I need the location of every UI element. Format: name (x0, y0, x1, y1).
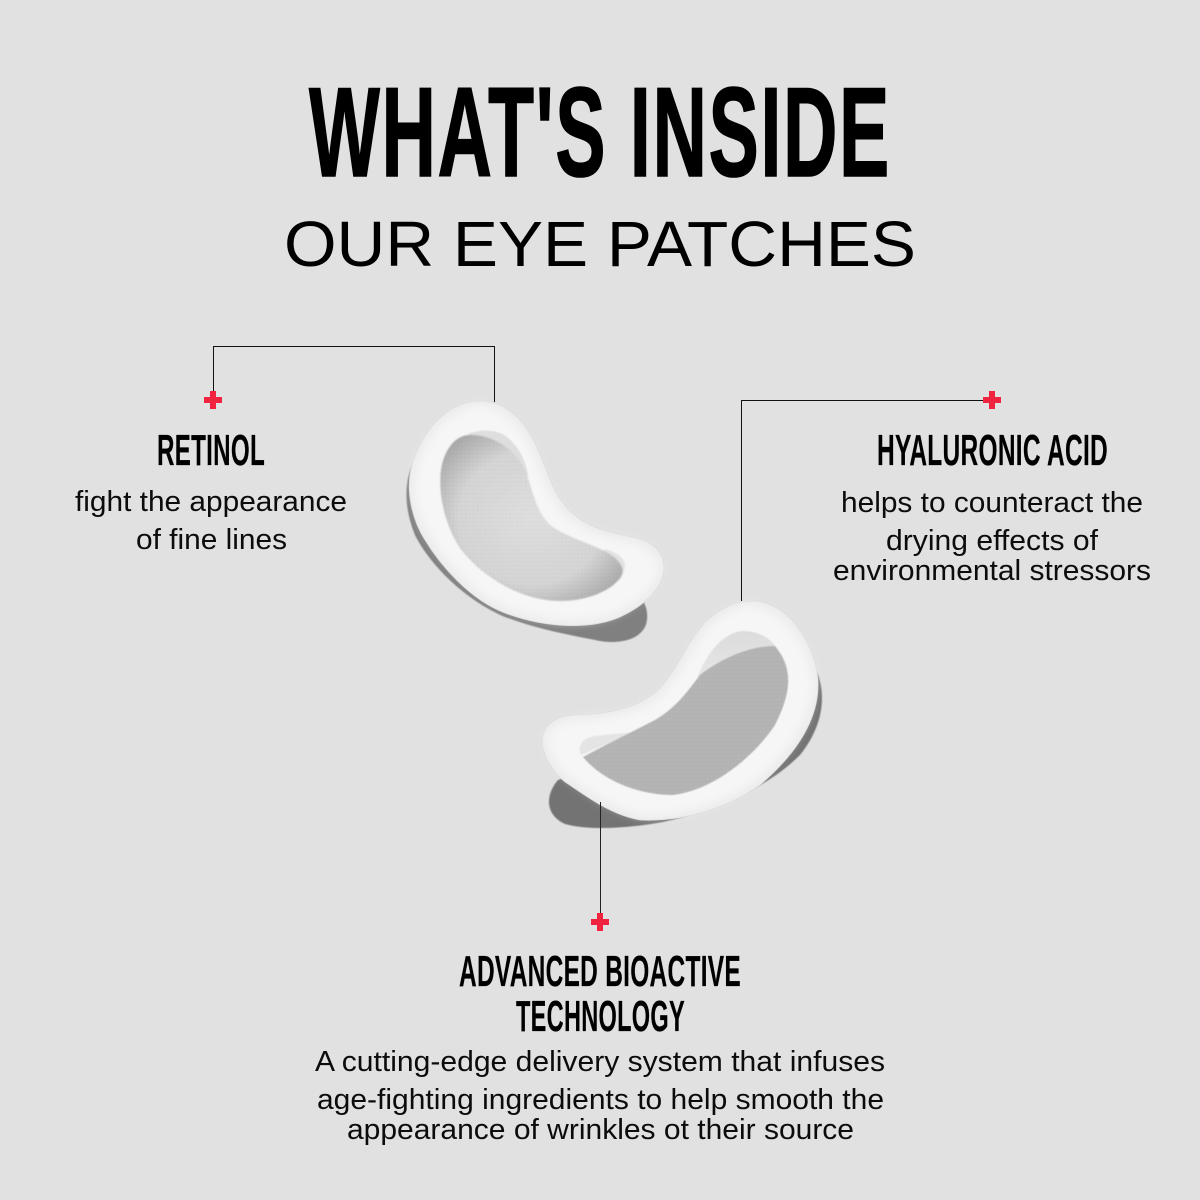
subtitle: OUR EYE PATCHES (284, 208, 916, 280)
text: hyaluronic acid description: drying effects of (886, 525, 1099, 557)
text: bioactive technology description: A cutting-edge delivery system that infuses (315, 1046, 885, 1078)
panel: retinol (75, 426, 347, 556)
heading: advanced bioactive technology: ADVANCED BIOACTIVE (459, 947, 741, 996)
plus icon: bioactive technology (591, 913, 609, 931)
text: hyaluronic acid description (833, 487, 1151, 587)
eye patch: lower (542, 601, 822, 828)
text: bioactive technology description: age-fighting ingredients to help smooth the (317, 1084, 884, 1116)
plus icon: hyaluronic acid (983, 391, 1001, 409)
text: bioactive technology description: appearance of wrinkles ot their source (347, 1114, 854, 1146)
heading: advanced bioactive technology (459, 947, 741, 1041)
panel: hyaluronic acid (833, 426, 1151, 587)
connector: retinol (214, 346, 494, 402)
text: retinol description (75, 486, 347, 556)
text: bioactive technology description (315, 1046, 885, 1146)
heading: retinol: RETINOL (157, 426, 265, 475)
eye patch: upper (406, 401, 664, 642)
plus icon: retinol (204, 391, 222, 409)
panel: advanced bioactive technology (315, 947, 885, 1146)
connector: hyaluronic acid (742, 400, 985, 601)
text: retinol description: fight the appearance (75, 486, 347, 518)
text: hyaluronic acid description: helps to counteract the (841, 487, 1143, 519)
heading: advanced bioactive technology: TECHNOLOGY (516, 992, 685, 1041)
connector: bioactive technology (600, 802, 602, 915)
text: hyaluronic acid description: environmental stressors (833, 555, 1151, 587)
text: retinol description: of fine lines (136, 524, 287, 556)
